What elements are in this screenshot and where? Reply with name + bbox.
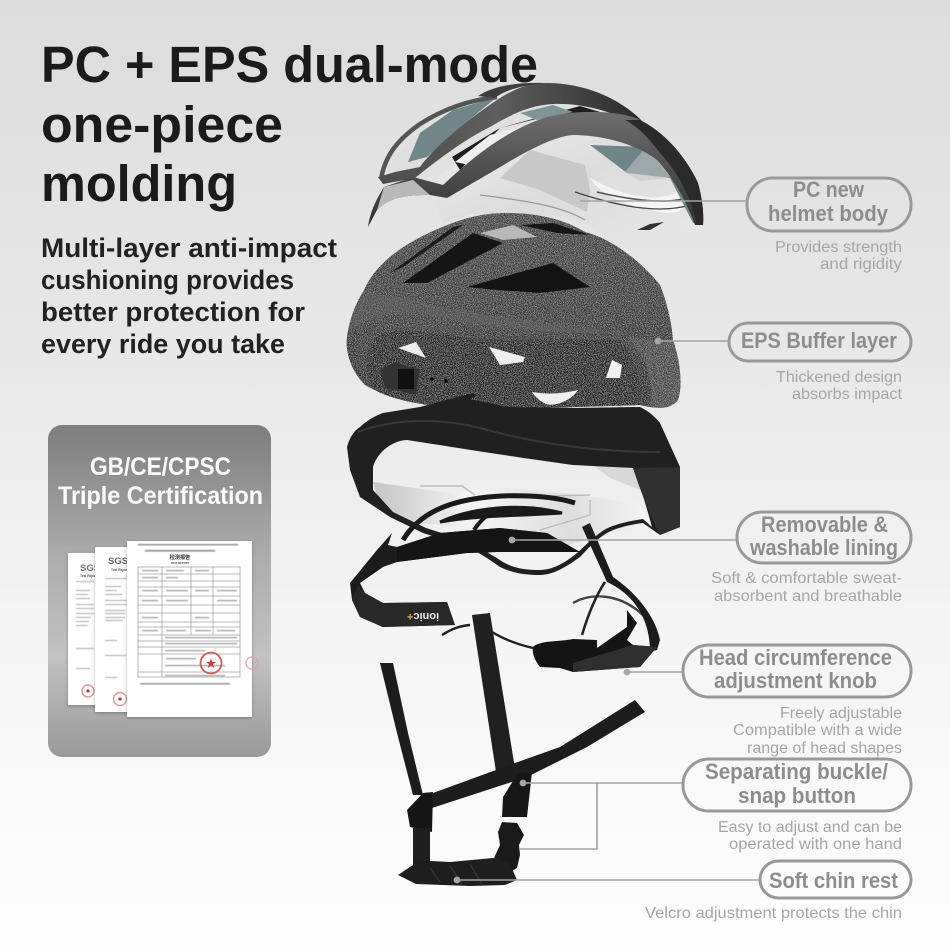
left strap lower (413, 828, 430, 862)
title (41, 36, 538, 212)
subtitle: Multi-layer anti-impact (41, 233, 337, 263)
red stamp (200, 652, 222, 674)
ventilation holes (398, 342, 426, 358)
document: SGS report middle (95, 547, 129, 712)
upper band (378, 83, 642, 184)
subtitle (41, 233, 337, 359)
callout: removable and washable lining: Soft & comfortable sweat- (711, 570, 902, 587)
card heading (58, 453, 263, 510)
callout: PC new helmet body: helmet body (768, 201, 889, 226)
document: SGS report middle: SGS (108, 556, 128, 567)
document: SGS report back (68, 553, 100, 705)
lower band (368, 112, 703, 227)
callout: removable and washable lining (509, 512, 911, 605)
callout: head circumference adjustment knob (624, 645, 911, 757)
callout: PC new helmet body (580, 177, 911, 273)
card heading: Triple Certification (58, 482, 263, 510)
lighter rim strip (348, 294, 630, 334)
callout: separating buckle and snap button: snap button (738, 783, 856, 808)
adjustment knob (533, 610, 657, 672)
part: EPS buffer layer (347, 213, 680, 410)
callout: removable and washable lining: washable lining (749, 535, 898, 560)
white inner foam (373, 482, 653, 545)
helmet exploded view (347, 83, 703, 886)
part: lining shell (347, 393, 680, 575)
dark gaps between the bands (452, 106, 640, 170)
callout: head circumference adjustment knob: Compatible with a wide (733, 722, 902, 739)
callout: EPS buffer layer: EPS Buffer layer (741, 328, 897, 353)
clear inner shell (430, 118, 703, 248)
logo: ionic+ (407, 610, 439, 622)
callout: PC new helmet body: PC new (793, 177, 865, 202)
left strap (380, 663, 423, 795)
callout: PC new helmet body: and rigidity (820, 256, 902, 273)
callout: separating buckle and snap button (519, 759, 911, 853)
part: removable lining and headband (350, 496, 660, 672)
panel: certification card (48, 425, 271, 757)
callout: separating buckle and snap button: Easy to adjust and can be (718, 819, 902, 836)
callout: head circumference adjustment knob: adjustment knob (714, 668, 877, 693)
chin pad (398, 858, 517, 886)
part: chin straps (380, 613, 645, 886)
callout: EPS buffer layer: absorbs impact (792, 386, 903, 403)
document: test report front: 检测报告 (170, 553, 190, 561)
callout: head circumference adjustment knob: Head circumference (699, 645, 892, 670)
vents (403, 233, 503, 283)
callout: head circumference adjustment knob: range of head shapes (747, 740, 902, 757)
subtitle: better protection for (41, 297, 305, 327)
document: test report front (127, 541, 258, 717)
subtitle: cushioning provides (41, 265, 294, 295)
part: PC helmet body (368, 83, 703, 248)
subtitle: every ride you take (41, 329, 285, 359)
document: SGS report back: Test Report (80, 574, 98, 578)
title: one-piece (41, 96, 283, 153)
callout: PC new helmet body: Provides strength (775, 239, 902, 256)
left window (388, 97, 497, 172)
card background (48, 425, 271, 757)
callout: separating buckle and snap button: operated with one hand (729, 836, 902, 853)
callout: soft chin rest (454, 861, 911, 922)
lining pad (350, 528, 580, 627)
outer black frame (347, 393, 680, 575)
report table (138, 567, 240, 677)
callout: soft chin rest: Velcro adjustment protects the chin (645, 905, 902, 922)
wires (442, 625, 533, 648)
document: SGS report back: SGS (80, 563, 100, 574)
thin outer ring (381, 97, 497, 179)
teal panels (408, 97, 497, 162)
middle strap (472, 613, 516, 785)
callout: EPS buffer layer (655, 323, 911, 403)
callout: removable and washable lining: Removable & (761, 512, 888, 537)
left slider (407, 792, 433, 832)
callout: EPS buffer layer: Thickened design (776, 369, 902, 386)
foam shell (347, 213, 680, 410)
right slider (502, 772, 532, 817)
inner cavity (368, 331, 641, 410)
snap buckle (494, 822, 524, 872)
callout: removable and washable lining: absorbent and breathable (714, 588, 902, 605)
ribs (403, 496, 575, 540)
callout: head circumference adjustment knob: Freely adjustable (780, 705, 902, 722)
red stamp: ★ (206, 658, 216, 670)
callout: separating buckle and snap button: Separating buckle/ (705, 759, 888, 784)
card heading: GB/CE/CPSC (90, 453, 231, 481)
cross strap (432, 700, 645, 808)
right cradle strap (582, 523, 660, 652)
title: PC + EPS dual-mode (41, 36, 538, 93)
title: molding (41, 155, 237, 212)
callout: soft chin rest: Soft chin rest (769, 868, 899, 893)
document: SGS report middle: Test Report (111, 568, 129, 572)
document: test report front: TEST REPORT (171, 561, 189, 565)
